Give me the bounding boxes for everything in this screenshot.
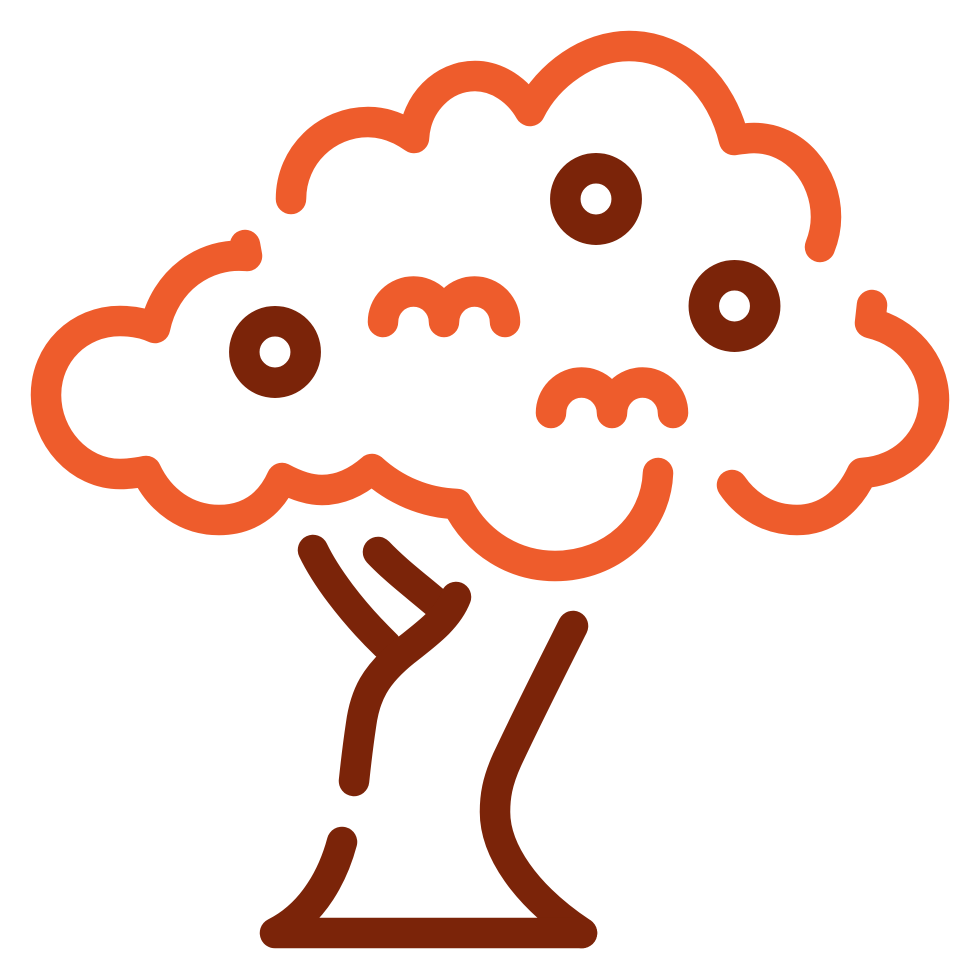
leaf tuft: lower: [551, 382, 673, 413]
tree crown outline: [46, 46, 934, 566]
fruit circles: [244, 168, 765, 383]
trunk and branches: [275, 550, 582, 933]
leaf tuft: upper: [383, 292, 505, 322]
